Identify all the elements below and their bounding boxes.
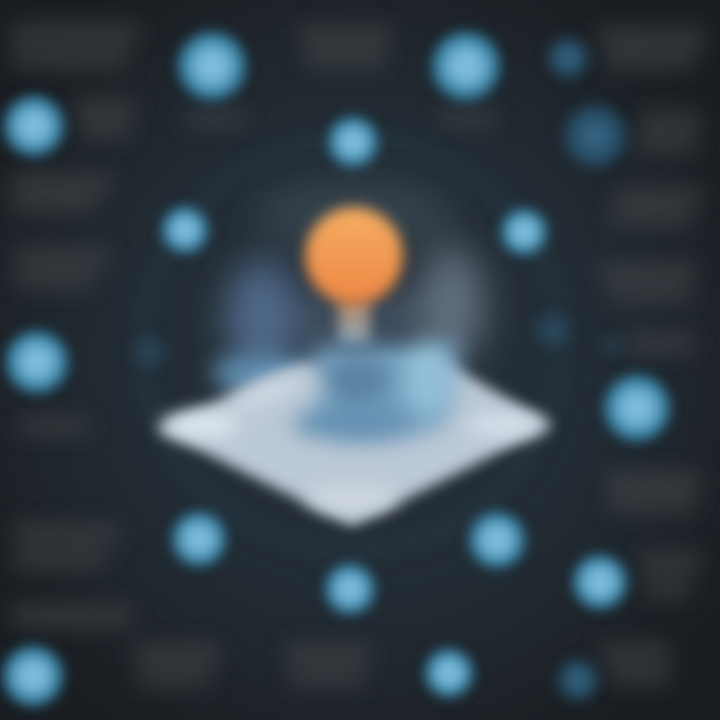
bowl and central shading <box>290 340 458 444</box>
orange sphere <box>305 207 403 305</box>
orbit ring <box>142 140 562 550</box>
stem <box>338 300 370 345</box>
platform highlights <box>162 368 543 512</box>
blue haze left of bowl <box>212 354 312 394</box>
diamond platform <box>156 362 553 526</box>
glow lobes behind sphere <box>226 180 484 376</box>
dim network nodes <box>133 38 626 700</box>
